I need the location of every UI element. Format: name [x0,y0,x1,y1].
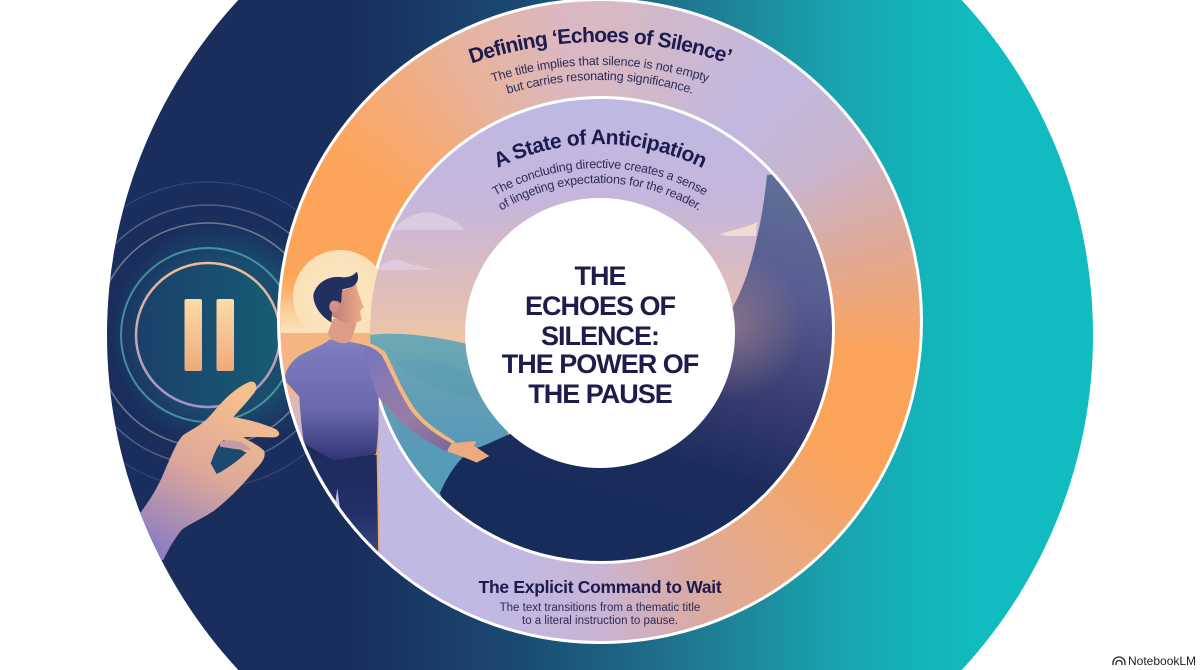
text block: The Explicit Command to Wait: The Explicit Command to Wait [479,577,722,597]
title: THE PAUSE [528,379,672,409]
center circle [465,198,735,468]
icon: pause button [136,263,280,407]
hair [313,272,358,323]
panel: middle ring [277,0,923,644]
text block: A State of Anticipation: The concluding directive creates a sense [492,159,707,195]
arm [363,345,452,452]
face [330,284,364,323]
logo: NotebookLM: NotebookLM [1128,654,1196,668]
legs [303,443,378,560]
dark hill [440,170,840,570]
clouds [377,212,465,270]
text block: Defining Echoes of Silence: The title implies that silence is not empty [490,56,710,84]
text block: The Explicit Command to Wait: The text transitions from a thematic title [500,602,700,614]
title: ECHOES OF [525,291,676,321]
illustration: landscape inside the disc [360,170,840,570]
illustration: sun, horizon in the ring [280,250,387,393]
text block: The Explicit Command to Wait: to a literal instruction to pause. [522,615,678,627]
sea and hills [370,334,508,530]
text block: A State of Anticipation: of lingeting expectations for the reader. [499,174,700,210]
shirt [284,339,380,461]
panel: inner disc [367,96,835,564]
icon: hand pressing the pause button [140,382,279,560]
title: THE POWER OF [502,349,699,379]
text block: Defining Echoes of Silence: but carries resonating significance. [506,71,692,94]
ear [329,301,339,313]
body rim light [284,344,455,450]
text block: A State of Anticipation: A State of Anticipation [496,129,706,168]
wispy cloud [720,222,757,236]
orange rim of leg [372,398,380,560]
neck [328,318,357,343]
illustration: man looking at the horizon [283,272,489,560]
title: THE [574,261,626,291]
title: SILENCE: [541,321,659,351]
icon: pause glow and echo rings [110,182,306,485]
text block: Defining Echoes of Silence: Defining ‘Echoes of Silence’ [468,27,732,64]
hand [448,441,489,463]
